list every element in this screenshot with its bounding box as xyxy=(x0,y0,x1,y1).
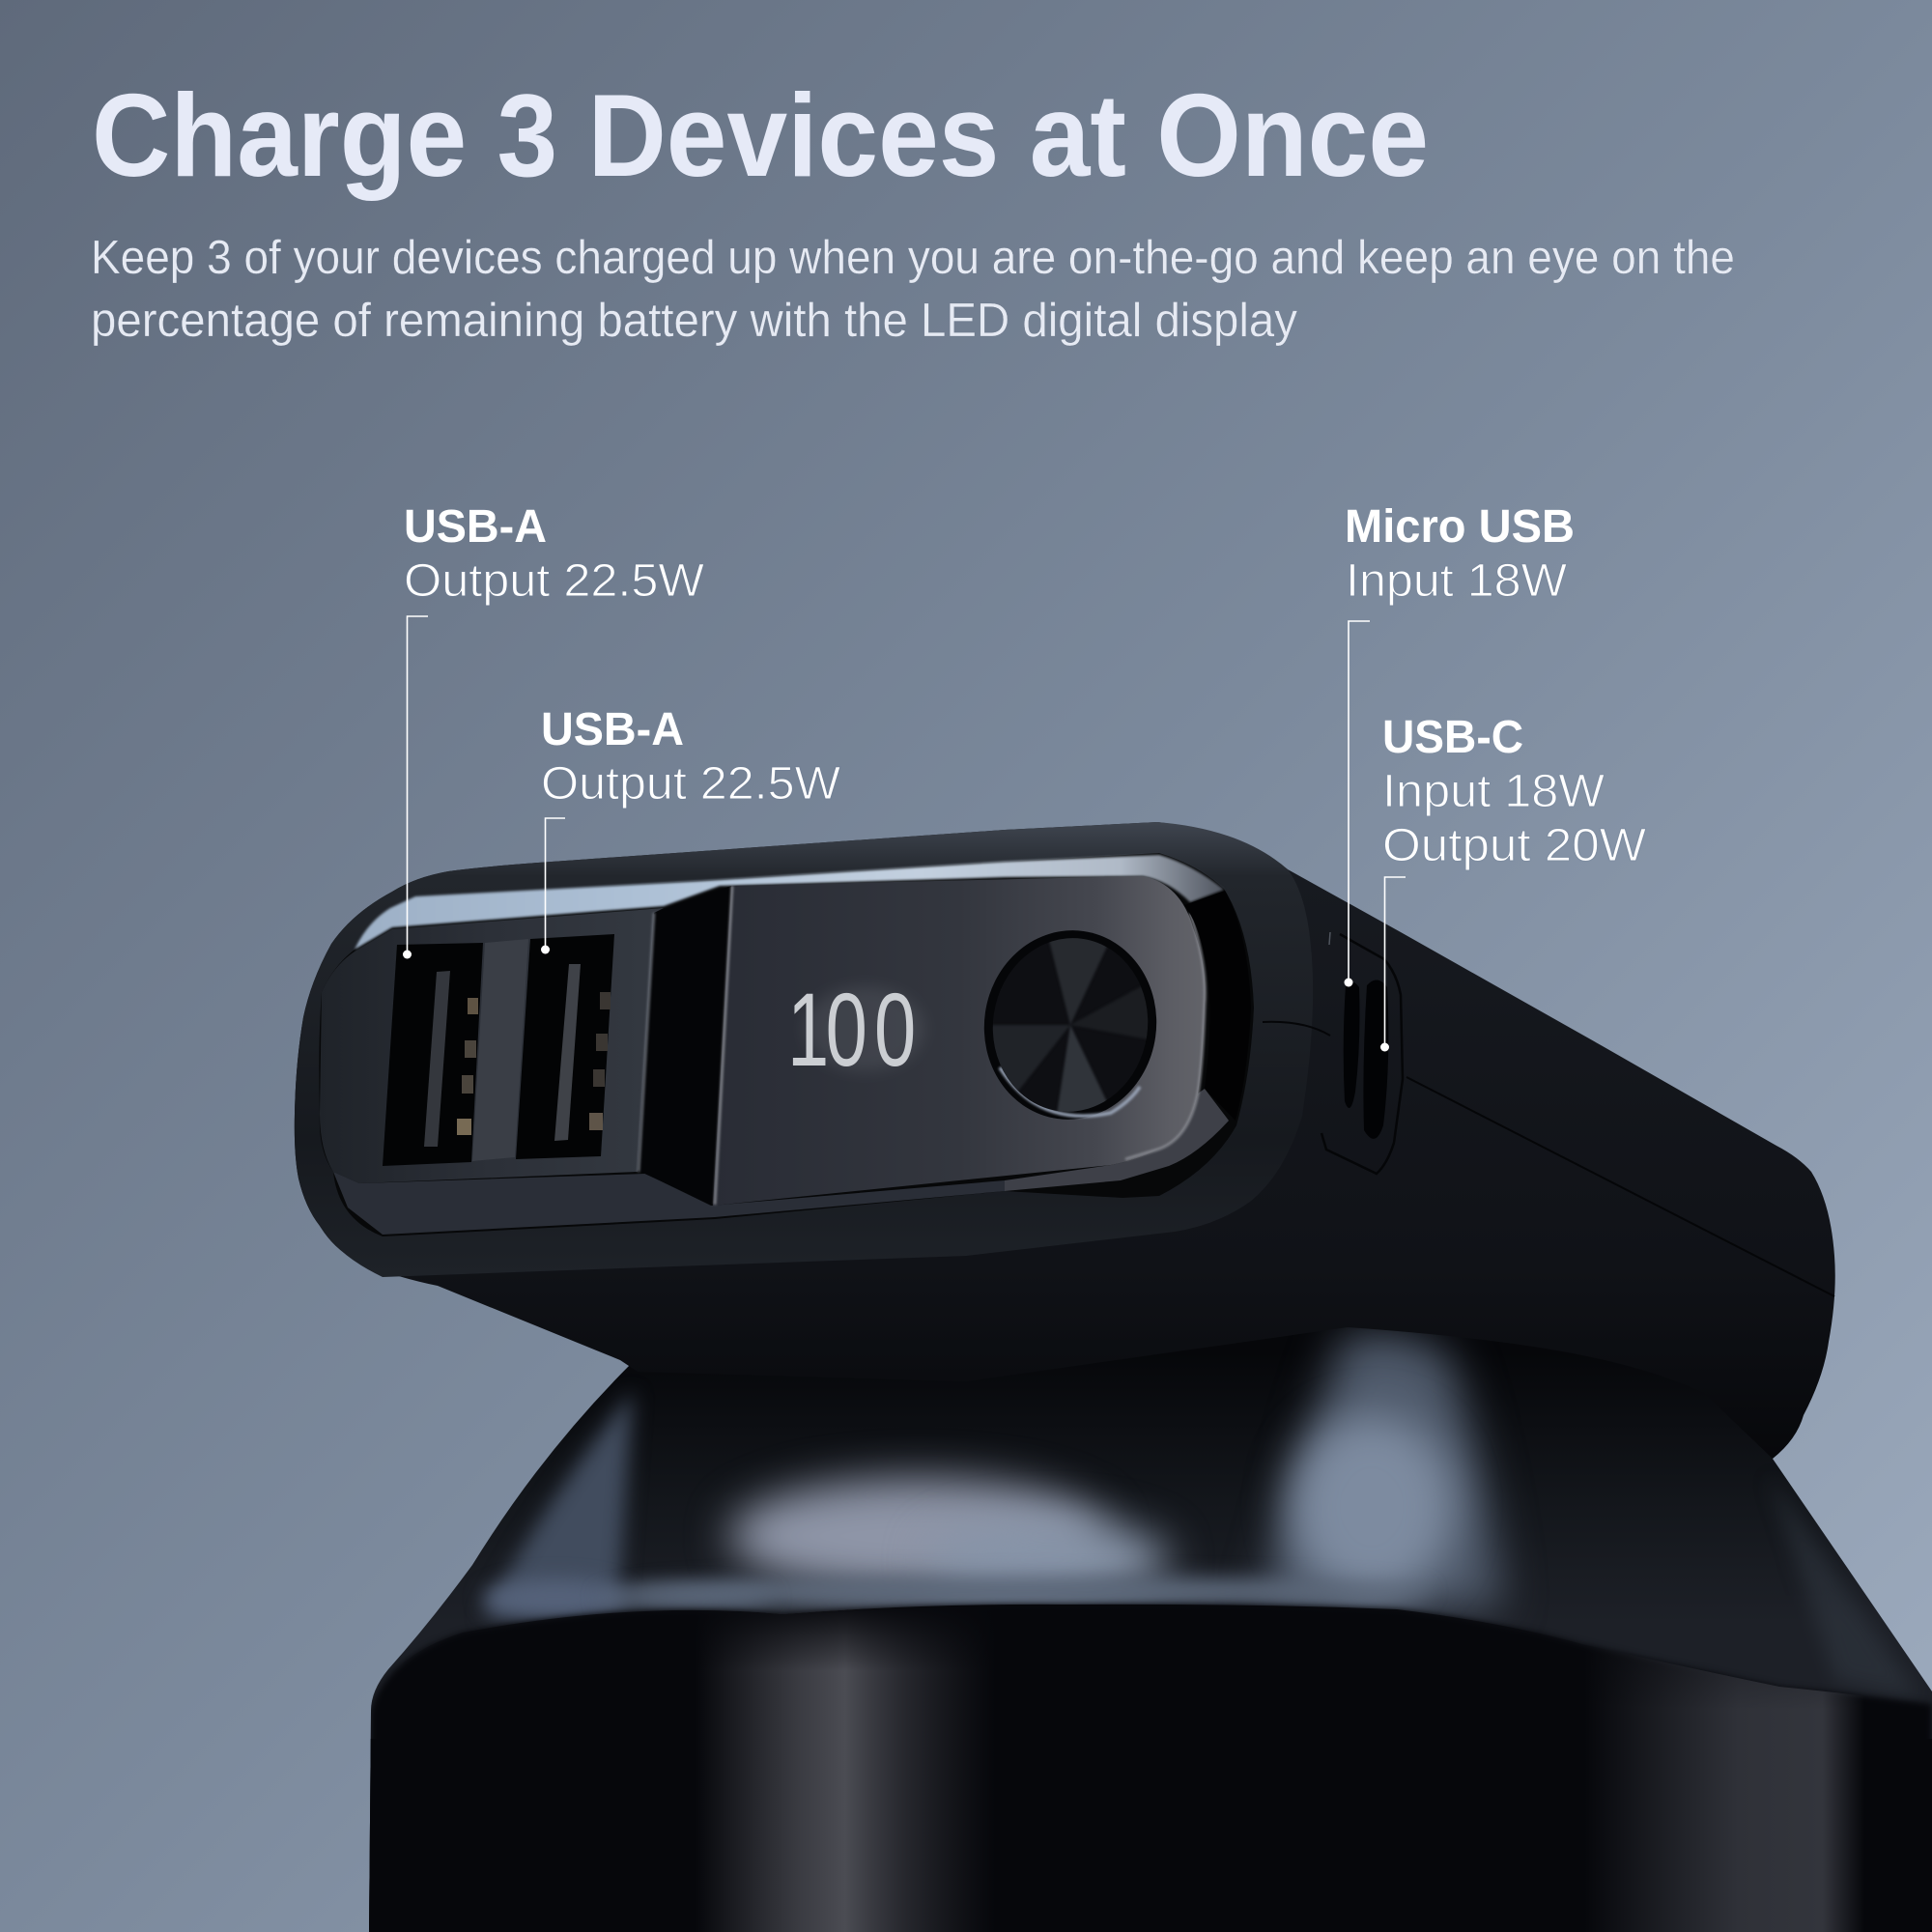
callout: Micro USB xyxy=(1345,501,1575,987)
front rubber rim xyxy=(295,822,1313,1277)
seam lines xyxy=(1263,1022,1834,1296)
USB-A port 1 xyxy=(383,943,483,1166)
callout: USB-C: Input 18W xyxy=(1382,766,1605,817)
lower gloss band xyxy=(333,1172,1005,1235)
product photo: power bank xyxy=(295,822,1835,1459)
title: Charge 3 Devices at Once xyxy=(92,70,1429,201)
frame edge highlight xyxy=(639,913,654,1172)
subtitle xyxy=(91,232,1735,347)
callout: Micro USB: Input 18W xyxy=(1346,555,1568,607)
product photo: bottle base xyxy=(369,1327,1932,1932)
gloss highlight band xyxy=(355,855,1224,950)
callout: USB-C: Output 20W xyxy=(1382,820,1647,871)
callout: USB-A right xyxy=(541,704,841,954)
callout: USB-A left: Output 22.5W xyxy=(404,555,705,607)
port frame xyxy=(320,908,664,1183)
Micro USB slot xyxy=(1344,981,1360,1108)
callout: USB-C xyxy=(1380,712,1647,1051)
plate edge highlights xyxy=(715,886,1205,1205)
LED glow xyxy=(805,986,924,1071)
LED display reading: 100 xyxy=(787,971,916,1088)
USB-A port 2 xyxy=(516,934,614,1159)
power bank body xyxy=(295,822,1835,1459)
USB-C slot xyxy=(1363,980,1388,1139)
callout: USB-A right: Output 22.5W xyxy=(541,758,841,810)
divider between ports xyxy=(472,939,528,1161)
callout: USB-A left: USB-A xyxy=(404,501,547,553)
subtitle: Keep 3 of your devices charged up when you are on-the-go and keep an eye on the xyxy=(91,232,1735,284)
side ports plate xyxy=(1321,932,1403,1174)
callout: Micro USB: Micro USB xyxy=(1345,501,1575,553)
callout: USB-C: USB-C xyxy=(1382,712,1523,763)
right gloss reflection xyxy=(1184,891,1251,1121)
cylinder body xyxy=(369,1605,1932,1932)
callout: USB-A right: USB-A xyxy=(541,704,684,755)
main display plate xyxy=(713,876,1206,1206)
black wedge xyxy=(640,886,731,1206)
callout: USB-A left xyxy=(403,501,705,958)
lower right bevel xyxy=(1005,1089,1229,1191)
subtitle: percentage of remaining battery with the LED digital display xyxy=(91,295,1297,347)
glossy black bezel xyxy=(319,853,1254,1236)
power button xyxy=(983,930,1157,1120)
